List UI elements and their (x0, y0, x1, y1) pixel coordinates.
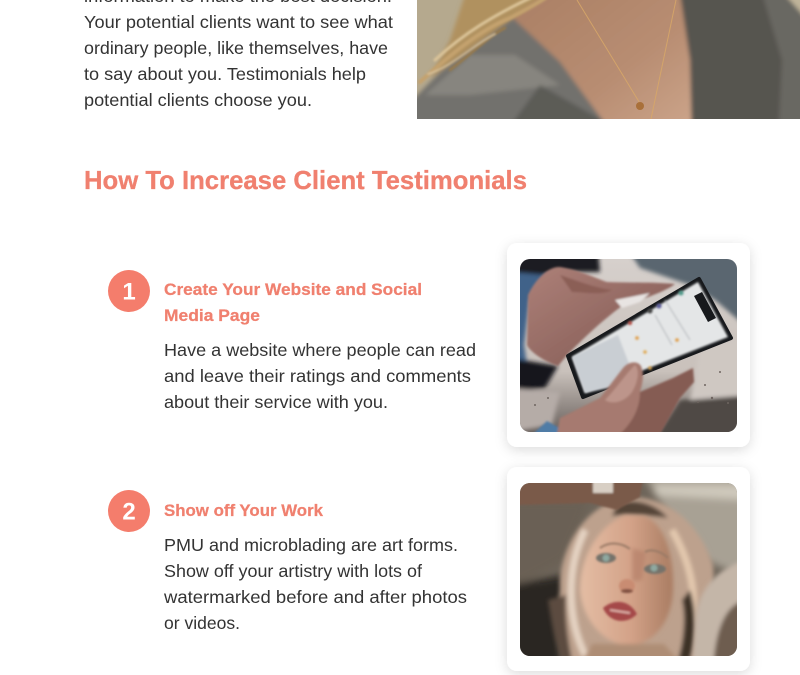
card: portrait photo (507, 467, 750, 671)
step 1 description: about their service with you. (164, 392, 388, 412)
step 1 number badge (108, 270, 150, 312)
step 2 description: Show off your artistry with lots of (164, 561, 422, 581)
photo: hands holding a smartphone (520, 259, 737, 432)
step 1 description (164, 340, 476, 412)
step 2 number badge: 2 (122, 498, 136, 526)
intro paragraph: to say about you. Testimonials help (84, 64, 366, 84)
photo: blonde woman portrait (520, 483, 737, 656)
step 2 description: watermarked before and after photos (163, 587, 467, 607)
step 2 number badge (108, 490, 150, 532)
step 2 title: Show off Your Work (164, 501, 324, 520)
step 1 title (164, 280, 422, 325)
step 1 (108, 270, 476, 412)
step 2 (108, 490, 467, 633)
step 1 title: Create Your Website and Social (164, 280, 422, 299)
step 2 description (163, 535, 467, 633)
intro paragraph: ordinary people, like themselves, have (84, 38, 388, 58)
step 1 number badge: 1 (122, 278, 136, 306)
step 2 description: or videos. (164, 613, 240, 633)
photo: woman's neck and grey top with necklace (417, 0, 800, 119)
intro paragraph: potential clients choose you. (84, 90, 312, 110)
intro paragraph (84, 0, 393, 110)
step 1 title: Media Page (164, 306, 260, 325)
step 2 description: PMU and microblading are art forms. (164, 535, 458, 555)
step 1 description: and leave their ratings and comments (164, 366, 471, 386)
intro paragraph: Your potential clients want to see what (84, 12, 393, 32)
smartphone (568, 279, 731, 397)
section heading: How To Increase Client Testimonials (84, 165, 527, 195)
step 1 description: Have a website where people can read (164, 340, 476, 360)
card: phone photo (507, 243, 750, 447)
